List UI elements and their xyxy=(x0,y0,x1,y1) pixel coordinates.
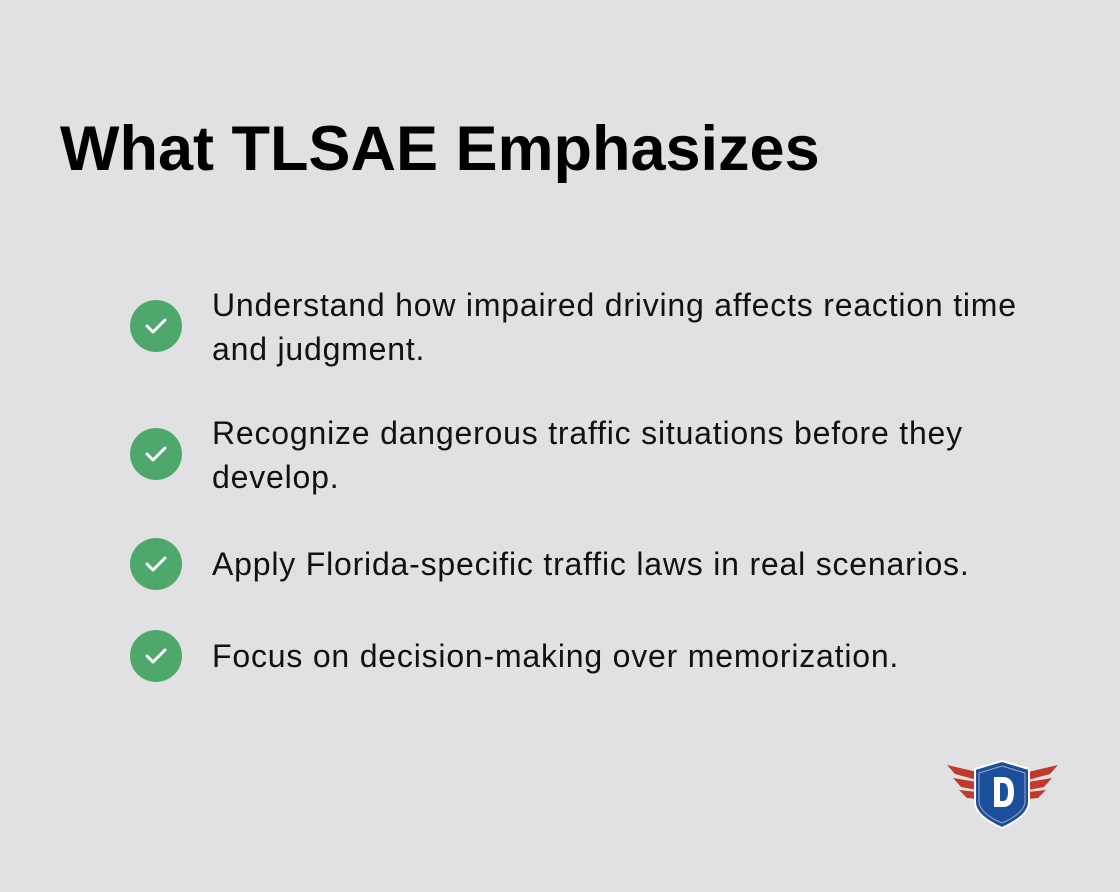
icon: check 3 xyxy=(130,538,182,590)
text 1: and judgment. xyxy=(212,331,425,367)
text 1 xyxy=(212,287,1017,367)
icon: check 4 xyxy=(130,630,182,682)
icon: check 2 xyxy=(130,428,182,480)
item 2 xyxy=(130,415,963,495)
logo xyxy=(947,760,1058,829)
icon: check 1 xyxy=(130,300,182,352)
text 2: Recognize dangerous traffic situations before they xyxy=(212,415,963,451)
title: What TLSAE Emphasizes xyxy=(60,114,820,184)
text 1: Understand how impaired driving affects reaction time xyxy=(212,287,1017,323)
text 2: develop. xyxy=(212,459,339,495)
item 4 xyxy=(130,630,899,682)
item 1 xyxy=(130,287,1017,367)
text 4: Focus on decision-making over memorization. xyxy=(212,638,899,674)
item 3 xyxy=(130,538,970,590)
text 3: Apply Florida-specific traffic laws in real scenarios. xyxy=(212,546,970,582)
text 2 xyxy=(212,415,963,495)
